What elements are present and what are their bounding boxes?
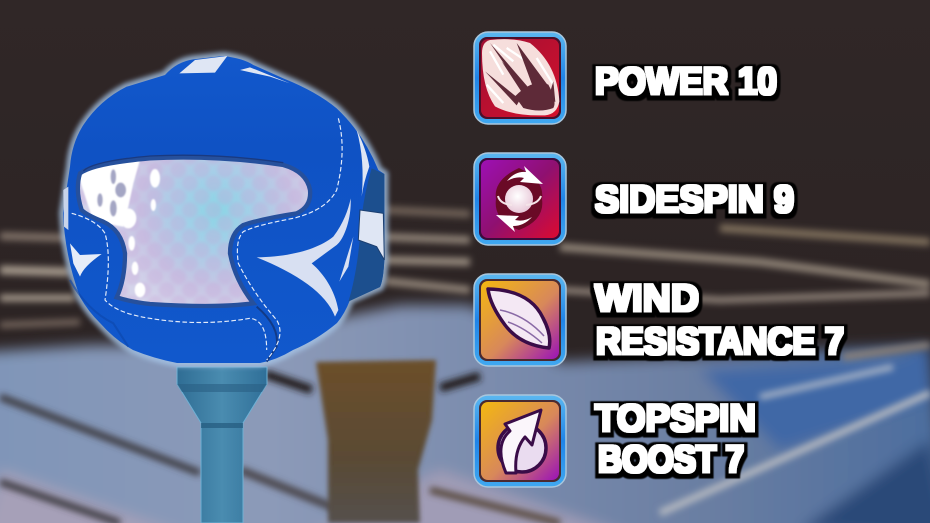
- icon: wind resistance: [474, 274, 566, 366]
- helmet glow: [63, 56, 384, 363]
- label: WIND RESISTANCE 7: RESISTANCE 7: [596, 321, 844, 363]
- label: TOPSPIN BOOST 7: TOPSPIN: [595, 398, 756, 440]
- strap white: [358, 210, 384, 260]
- white stripe on top strap: [179, 56, 227, 73]
- label: SIDESPIN 9: SIDESPIN 9: [595, 179, 794, 221]
- label: POWER 10: POWER 10: [595, 61, 777, 103]
- helmet shell: [63, 56, 384, 363]
- icon: sidespin: [474, 153, 566, 245]
- jaw seam: [257, 307, 277, 362]
- stat: topspin boost: [474, 395, 756, 487]
- label: WIND RESISTANCE 7: [595, 278, 844, 363]
- stat: power: [474, 32, 777, 124]
- label: WIND RESISTANCE 7: WIND: [595, 278, 699, 320]
- golf tee: [177, 367, 267, 523]
- stat: wind resistance: [474, 274, 844, 366]
- golf ball with boxing helmet: [63, 56, 384, 363]
- white flame left: [70, 243, 102, 277]
- side ear guard: [348, 168, 384, 302]
- label: TOPSPIN BOOST 7: BOOST 7: [598, 439, 744, 481]
- stat: sidespin: [474, 153, 794, 245]
- corner post: [316, 360, 436, 523]
- icon: topspin boost: [474, 395, 566, 487]
- stitching: [72, 118, 342, 360]
- ball through visor: [70, 150, 317, 313]
- label: TOPSPIN BOOST 7: [595, 398, 756, 481]
- icon: power: [474, 32, 566, 124]
- white flame right: [257, 198, 351, 317]
